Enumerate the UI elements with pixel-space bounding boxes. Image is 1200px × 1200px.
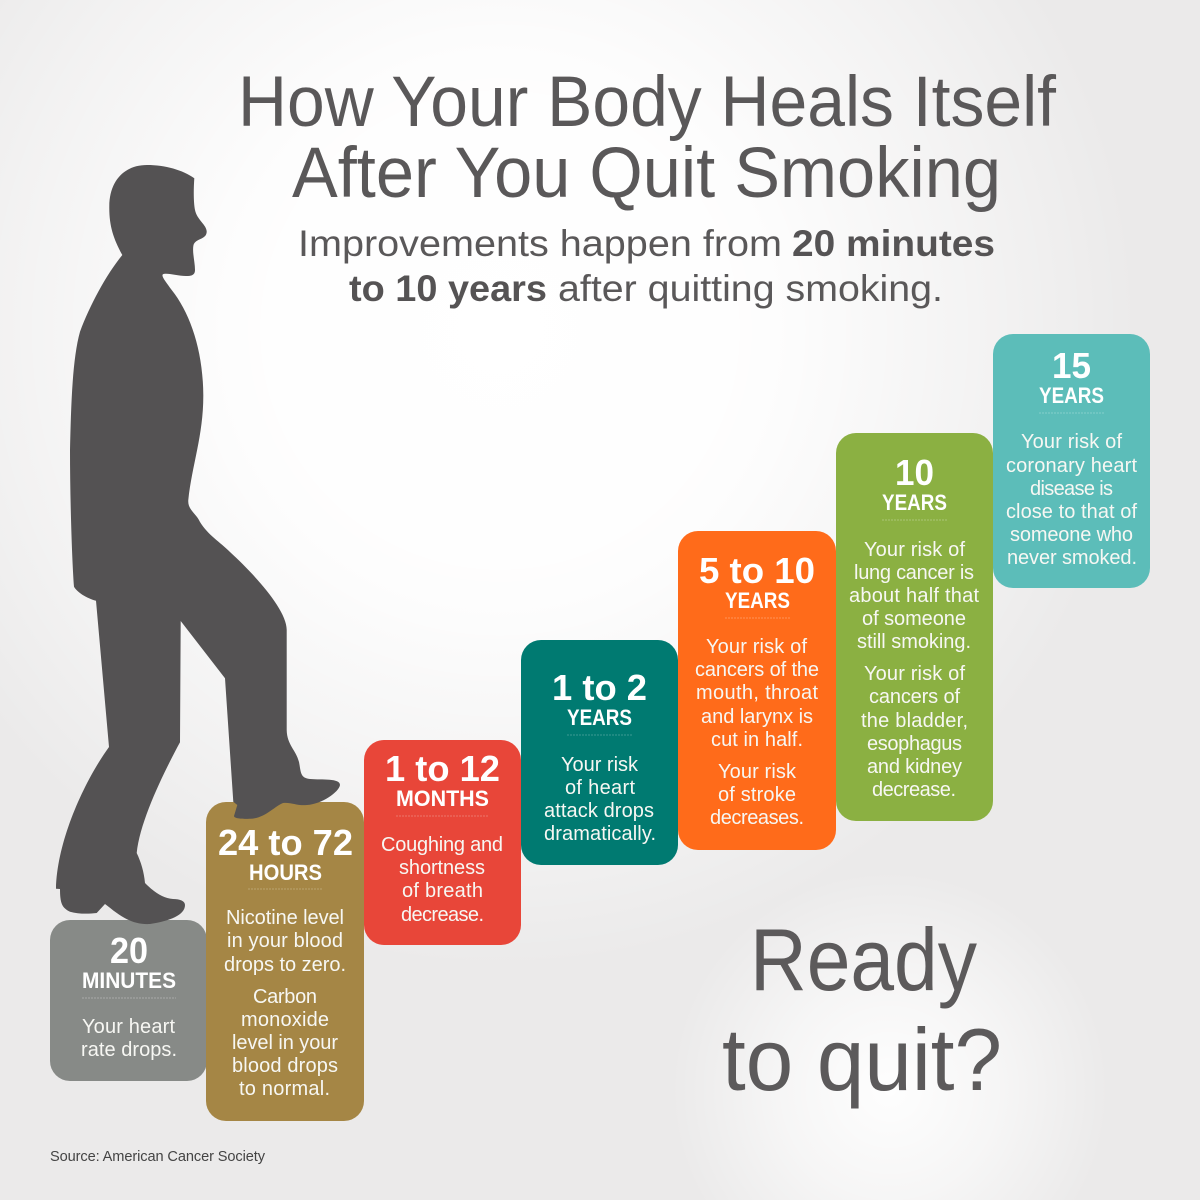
panel: 15 years (993, 334, 1150, 588)
panel: 1 to 12 months: Coughing and (381, 834, 503, 856)
panel: 10 years: cancers of (869, 686, 960, 708)
panel: 10 years: lung cancer is (854, 562, 974, 584)
panel: 24 to 72 hours: to normal. (239, 1078, 330, 1100)
panel: 1 to 12 months: 1 to 12 (385, 748, 500, 789)
panel: 5 to 10 years: and larynx is (701, 706, 813, 728)
title: How Your Body Heals Itself (238, 63, 1056, 142)
title (238, 63, 1056, 213)
panel: 10 years: Your risk of (864, 663, 965, 685)
panel: 1 to 2 years: YEARS (567, 705, 632, 730)
panel: 15 years: disease is (1030, 478, 1113, 500)
panel: 5 to 10 years: decreases. (710, 807, 804, 829)
panel: 1 to 2 years: dramatically. (544, 823, 656, 845)
panel: 5 to 10 years: cancers of the (695, 659, 819, 681)
panel: 15 years: coronary heart (1006, 455, 1137, 477)
panel: 15 years: someone who (1010, 524, 1133, 546)
panel: 5 to 10 years (678, 531, 836, 850)
panel: 24 to 72 hours: blood drops (232, 1055, 338, 1077)
call to action: ready to quit: to quit? (722, 1010, 1002, 1109)
call to action: ready to quit: Ready (750, 910, 977, 1009)
panel: 24 to 72 hours: level in your (232, 1032, 338, 1054)
panel: 24 to 72 hours: Carbon (253, 986, 317, 1008)
panel: 1 to 2 years (521, 640, 678, 865)
call to action: ready to quit (722, 910, 1002, 1109)
panel: 1 to 2 years: 1 to 2 (552, 667, 647, 708)
panel: 15 years: YEARS (1039, 383, 1104, 408)
panel: 5 to 10 years: of stroke (718, 784, 796, 806)
panel: 1 to 12 months: MONTHS (396, 786, 489, 811)
panel: 5 to 10 years: Your risk of (706, 636, 807, 658)
panel: 15 years: Your risk of (1021, 431, 1122, 453)
panel: 10 years (836, 433, 993, 821)
panel: 10 years: of someone (862, 608, 966, 630)
icon: walking man silhouette (56, 165, 340, 924)
panel: 24 to 72 hours: Nicotine level (226, 907, 344, 929)
panel: 15 years: never smoked. (1007, 547, 1137, 569)
panel: 5 to 10 years: 5 to 10 (699, 550, 815, 591)
panel: 10 years: the bladder, (861, 710, 968, 732)
panel: 1 to 2 years: Your risk (561, 754, 639, 776)
panel: 10 years: YEARS (882, 490, 947, 515)
panel: 1 to 12 months: shortness (399, 857, 485, 879)
panel: 1 to 12 months: of breath (402, 880, 483, 902)
panel: 20 minutes: Your heart (82, 1016, 175, 1038)
title: After You Quit Smoking (292, 134, 1001, 213)
subtitle: 20 minutes (792, 223, 995, 264)
subtitle: Improvements happen from (298, 223, 782, 264)
panel: 1 to 12 months: decrease. (401, 904, 484, 926)
panel: 15 years: close to that of (1006, 501, 1137, 523)
panel: 5 to 10 years: cut in half. (711, 729, 803, 751)
panel: 24 to 72 hours: in your blood (227, 930, 343, 952)
panel: 10 years: 10 (895, 452, 934, 493)
panel: 1 to 2 years: attack drops (544, 800, 654, 822)
source note: Source: American Cancer Society (50, 1149, 266, 1165)
panel: 10 years: Your risk of (864, 539, 965, 561)
panel: 10 years: decrease. (872, 779, 956, 801)
panel: 10 years: esophagus (867, 733, 962, 755)
panel: 1 to 2 years: of heart (565, 777, 635, 799)
panel: 5 to 10 years: Your risk (718, 761, 797, 783)
panel: 24 to 72 hours: 24 to 72 (218, 822, 353, 863)
panel: 5 to 10 years: YEARS (725, 588, 790, 613)
panel: 10 years: about half that (849, 585, 979, 607)
panel: 15 years: 15 (1052, 345, 1091, 386)
subtitle (298, 223, 995, 309)
panel: 24 to 72 hours: drops to zero. (224, 954, 346, 976)
panel: 24 to 72 hours (206, 802, 364, 1121)
panel: 10 years: still smoking. (857, 631, 971, 653)
panel: 20 minutes: rate drops. (81, 1039, 177, 1061)
panel: 5 to 10 years: mouth, throat (696, 682, 818, 704)
panel: 20 minutes (50, 920, 207, 1081)
subtitle: after quitting smoking. (558, 268, 943, 309)
panel: 20 minutes: 20 (110, 930, 148, 971)
panel: 20 minutes: MINUTES (82, 968, 176, 993)
panel: 24 to 72 hours: HOURS (249, 860, 322, 885)
panel: 1 to 12 months (364, 740, 521, 945)
subtitle: to 10 years (349, 268, 547, 309)
panel: 10 years: and kidney (867, 756, 962, 778)
panel: 24 to 72 hours: monoxide (241, 1009, 329, 1031)
